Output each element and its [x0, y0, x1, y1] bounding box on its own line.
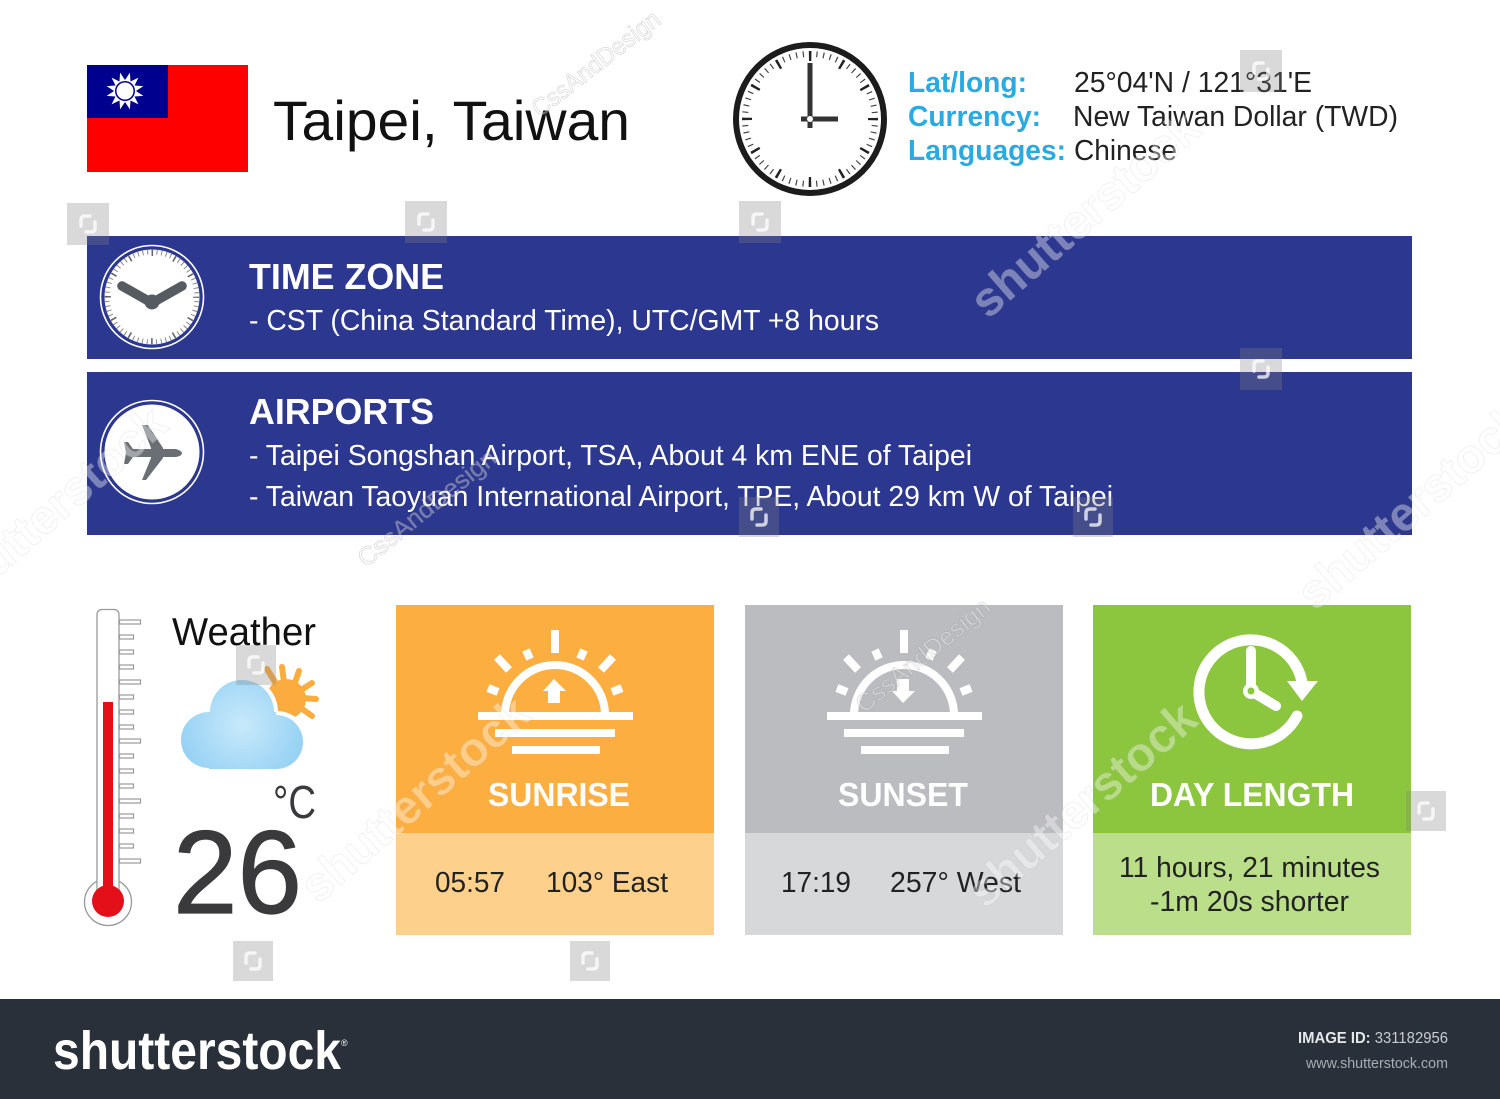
sunset time: 17:19: [781, 867, 851, 899]
location facts: Lat/long:: [908, 67, 1027, 99]
watermark overlay: shutterstock: [290, 686, 541, 913]
panel: sunset: [745, 605, 1063, 935]
airport line 2: - Taiwan Taoyuan International Airport, TPE, About 29 km W of Taipei: [249, 481, 1113, 513]
watermark overlay: shutterstock: [957, 691, 1208, 918]
title: Taipei, Taiwan: [273, 89, 630, 152]
location facts: [908, 67, 1398, 167]
time zone heading: TIME ZONE: [249, 256, 444, 297]
location facts: 25°04'N / 121°31'E: [1074, 67, 1312, 99]
thermometer: [84, 610, 140, 926]
icon: sunrise: [478, 630, 633, 754]
flag of Taiwan: [87, 65, 248, 172]
sunset azimuth: 257° West: [890, 867, 1021, 899]
panel: day length: [1093, 605, 1411, 935]
location facts: Languages:: [908, 135, 1066, 167]
panel: airports: [87, 372, 1412, 535]
footer bar: [0, 999, 1500, 1099]
icon: time zone clock: [100, 246, 204, 348]
watermark overlay: CssAndDesign: [352, 444, 502, 573]
airport line 1: - Taipei Songshan Airport, TSA, About 4 km ENE of Taipei: [249, 440, 972, 472]
location facts: New Taiwan Dollar (TWD): [1073, 101, 1398, 133]
footer logo: shutterstock: [53, 1021, 342, 1081]
location facts: Currency:: [908, 101, 1041, 133]
panel: sunrise: [396, 605, 714, 935]
icon: local time clock: [736, 45, 884, 193]
panel: time zone: [87, 236, 1412, 359]
sunrise time: 05:57: [435, 867, 505, 899]
airports heading: AIRPORTS: [249, 391, 434, 432]
icon: sunset: [827, 630, 982, 754]
icon: sun behind cloud: [181, 667, 316, 773]
watermark overlay: shutterstock: [960, 101, 1211, 328]
sunset heading: SUNSET: [838, 776, 968, 813]
sunrise azimuth: 103° East: [546, 867, 668, 899]
image id: IMAGE ID: 331182956: [1298, 1030, 1448, 1047]
day length value: 11 hours, 21 minutes: [1119, 852, 1380, 884]
day length heading: DAY LENGTH: [1150, 776, 1354, 813]
temperature: 26: [173, 807, 302, 939]
watermark overlay: CssAndDesign: [850, 593, 996, 719]
time zone text: - CST (China Standard Time), UTC/GMT +8 hours: [249, 305, 879, 337]
location facts: Chinese: [1074, 135, 1177, 167]
icon: airplane: [100, 400, 204, 504]
weather heading: Weather: [172, 611, 316, 654]
registered mark: ®: [341, 1038, 348, 1048]
icon: day length clock: [1199, 640, 1318, 744]
sunrise heading: SUNRISE: [488, 776, 630, 813]
watermark overlay: CssAndDesign: [526, 5, 666, 123]
degrees celsius: °C: [273, 776, 316, 828]
day length change: -1m 20s shorter: [1150, 886, 1349, 918]
footer url: www.shutterstock.com: [1305, 1056, 1448, 1072]
